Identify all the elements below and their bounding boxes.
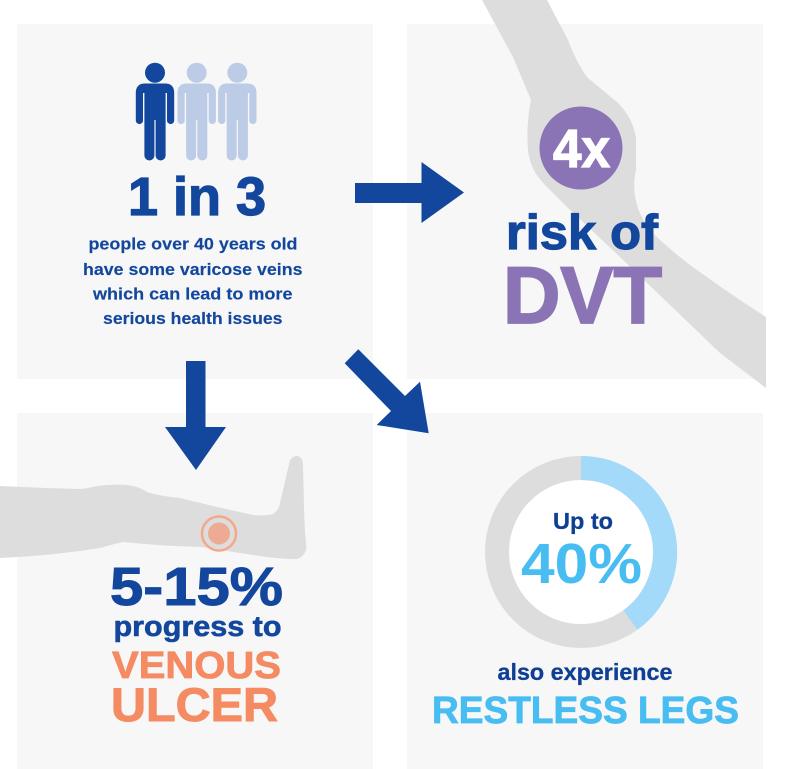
- text: progress to: progress to: [114, 611, 282, 643]
- heading: 5-15%: 5-15%: [110, 557, 283, 617]
- badge: 4x: [540, 106, 622, 190]
- arrow: down to ulcer: [165, 361, 226, 470]
- illustration: leg silhouette: [0, 456, 306, 559]
- icon: third person: [218, 63, 256, 160]
- badge: 4x: 4x: [553, 119, 610, 179]
- panel: restless legs: [407, 413, 763, 769]
- text block: description: people over 40 years old: [88, 236, 298, 254]
- illustration: leg silhouette: [482, 0, 766, 388]
- panel: 1 in 3 prevalence: [17, 24, 373, 379]
- arrow: right to DVT: [355, 162, 464, 223]
- chart: donut 40%: [485, 456, 677, 648]
- text block: description: which can lead to more: [92, 286, 292, 304]
- heading: risk of: risk of: [506, 206, 659, 260]
- icon: ulcer marker: [202, 516, 236, 550]
- panel: DVT risk: [407, 0, 766, 388]
- heading: 1 in 3: 1 in 3: [128, 167, 266, 227]
- heading: ULCER: ULCER: [111, 678, 278, 731]
- text block: description: have some varicose veins: [83, 261, 302, 279]
- arrow: diagonal to restless legs: [345, 349, 429, 433]
- heading: VENOUS: VENOUS: [112, 645, 281, 687]
- text block: description: serious health issues: [103, 310, 282, 328]
- heading: DVT: DVT: [503, 251, 662, 341]
- heading: RESTLESS LEGS: RESTLESS LEGS: [432, 690, 739, 732]
- icon: three people, one highlighted: [136, 63, 256, 160]
- icon: second person: [178, 63, 216, 160]
- text block: description: [83, 236, 302, 328]
- text: Up to: Up to: [553, 508, 613, 534]
- panel: venous ulcer: [0, 413, 373, 769]
- icon: highlighted person: [136, 63, 174, 160]
- text: also experience: also experience: [498, 659, 672, 685]
- heading: 40%: 40%: [521, 532, 642, 596]
